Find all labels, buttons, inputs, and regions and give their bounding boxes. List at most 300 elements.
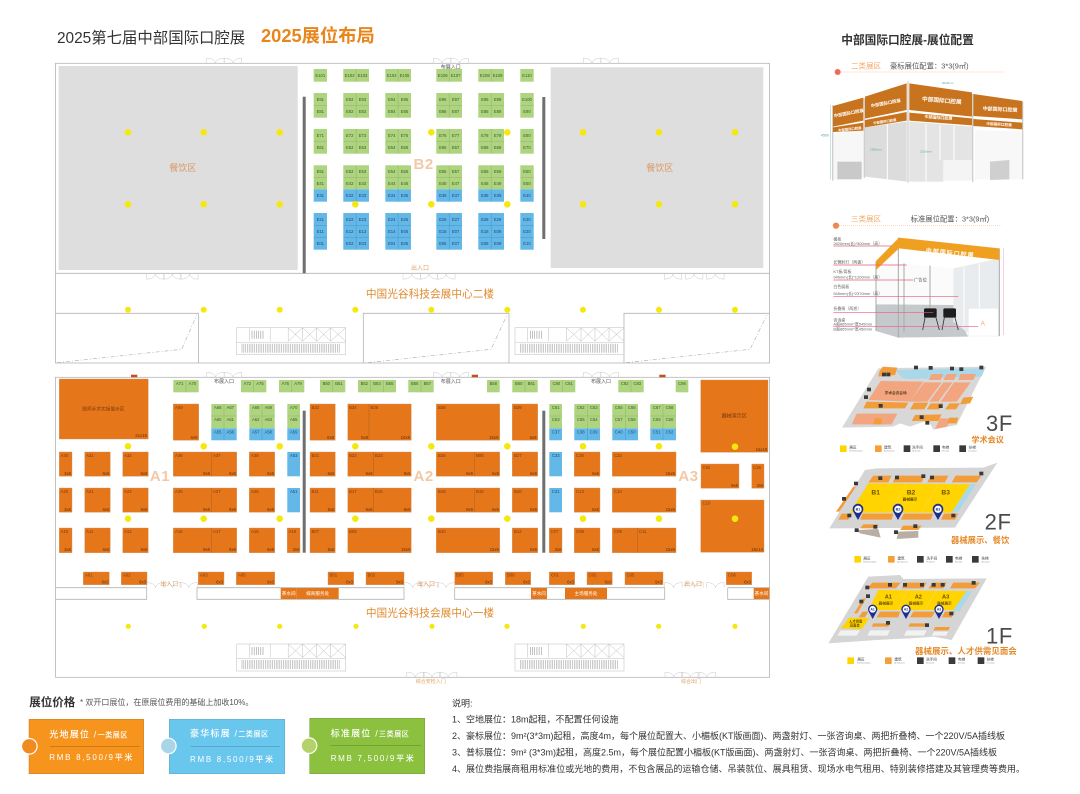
premium booth fascia text: 中部国际口腔展: [986, 121, 1012, 127]
orange booth row: y528: B07: [312, 529, 320, 534]
booth band: E61-E80: E68: [481, 145, 489, 150]
orange booth row: 9m deep: 10x9: [401, 435, 411, 440]
booth band: E01-E30: E21: [317, 217, 325, 222]
orange booth row: y528: 6x6: [267, 547, 275, 552]
orange booth row: y452: 3x6: [757, 483, 764, 488]
legend 2F: 建筑: [897, 555, 905, 560]
price card: premium booth: [160, 719, 285, 774]
standard booth header: 三类展区: [851, 214, 881, 224]
legend 1F: 电梯: [958, 657, 966, 662]
orange booth row: y528: 15x6: [401, 547, 411, 552]
orange booth row: along corridor: B05: [456, 572, 464, 578]
legend 3F: Exhibition Area: [849, 450, 863, 453]
standard booth annotations: 折叠椅（两把）: [833, 305, 861, 311]
orange booth row: y488: C10: [614, 489, 622, 494]
booth band: E61-E80: E75: [401, 133, 409, 138]
booth band: E41-E60: E58: [481, 169, 489, 174]
booth band: E81-E100: E85: [401, 109, 409, 114]
map 3F: [842, 366, 986, 430]
zone labels A1 A2 A3: A2: [414, 468, 434, 485]
price card: raw space: RMB 8,500/9平米: [49, 752, 134, 762]
booth band: E01-E30: E28: [481, 217, 489, 222]
booth group: green and blue standard blocks C37-C68: C50: [628, 430, 636, 434]
booth band: E31-E40: E36: [439, 193, 447, 198]
standard booth header: [833, 214, 1002, 229]
legend 3F: 建筑: [884, 445, 892, 450]
booth band: E01-E30: E13: [359, 229, 367, 234]
booth group: green and blue standard blocks C37-C68: C39: [590, 430, 598, 434]
standard booth structure: [876, 238, 999, 338]
booth band: E41-E60: E53: [359, 169, 367, 174]
orange booth row: y452: 9x6: [203, 471, 211, 476]
booth band: E81-E100: E88: [481, 109, 489, 114]
booth band: E61-E80: E61: [317, 145, 325, 150]
booth band: E81-E100: E83: [359, 109, 367, 114]
price card: standard booth: RMB 7,500/9平米: [331, 753, 415, 763]
booth band: E81-E100: E96: [439, 97, 447, 102]
orange booth row: along corridor: 6x3: [523, 580, 531, 584]
legend 3F: [840, 445, 977, 453]
floor 2 lift core right: [515, 328, 624, 355]
notes text block: [452, 698, 1025, 774]
standard booth annotations: B面865mm*宽450mm: [833, 325, 873, 331]
orange booth row: y488: B17: [349, 489, 357, 494]
booth band: E81-E100: [314, 93, 534, 118]
standard booth annotations: [833, 235, 1003, 335]
booth group: green and blue standard blocks A55-A70: A56: [227, 430, 235, 434]
orange booth row: along corridor: C06: [728, 572, 736, 578]
orange booth row: y528: 15x6: [490, 547, 500, 552]
booth band: E81-E100: E98: [481, 97, 489, 102]
booth group: green and blue standard blocks A55-A70: A51: [290, 489, 298, 494]
booth band: E31-E40: E38: [481, 193, 489, 198]
orange booth row: y488: B11: [312, 489, 319, 494]
service rooms along corridor: 茶水间: [755, 590, 769, 597]
booth band: E61-E80: E66: [439, 145, 447, 150]
booth band: E01-E30: E11: [317, 229, 325, 234]
booth group: green and blue standard blocks C37-C68: C65: [615, 405, 623, 410]
orange booth row: 9m deep: 5x9: [361, 435, 369, 440]
booth band: E61-E80: [314, 129, 534, 154]
premium booth fascia text: 中部国际口腔展: [873, 117, 897, 125]
booth band: E01-E30: E08: [481, 241, 489, 246]
premium booth dimensions: [821, 81, 954, 179]
booth group: green and blue standard blocks A55-A70: A62: [252, 417, 260, 422]
orange booth row: 9m deep: 15x9: [489, 435, 499, 440]
label 3F: [971, 411, 1013, 444]
orange booth row: y488: 6x6: [103, 507, 110, 512]
booth band: E01-E30: E05: [401, 241, 409, 246]
price card: raw space: 光地展位 /一类展区: [49, 728, 128, 740]
orange booth row: y452: 9x6: [404, 471, 411, 476]
booth price heading: 展位价格: [29, 695, 76, 709]
booth band: E01-E30: E26: [439, 217, 447, 222]
legend 2F: 扶梯: [981, 555, 989, 560]
legend 3F: 洗手间: [912, 445, 923, 450]
label 1F: 1F: [986, 624, 1013, 649]
orange booth row: y528: A16: [175, 529, 183, 534]
orange booth row: y528: B09: [349, 529, 357, 534]
booth row: top green A71-C96: A71: [176, 381, 184, 386]
premium booth dimensions: 2100mm: [920, 150, 932, 154]
orange booth row: y488: 15x6: [666, 507, 676, 512]
orange booth row: y488: A26: [175, 489, 183, 494]
booth band: E01-E30: E27: [452, 217, 460, 222]
premium booth fascia text: 中部国际口腔展: [838, 125, 862, 133]
booth band: E41-E60: E49: [494, 181, 502, 186]
booth band: E01-E30: E07: [452, 229, 460, 234]
booth band: E81-E100: E90: [523, 109, 531, 114]
booth row: top green A71-C96: B61: [528, 381, 536, 386]
booth band: E01-E30: [314, 213, 534, 250]
floor 2 hall name: 中国光谷科技会展中心二楼: [366, 288, 494, 300]
service rooms along corridor: 茶水间: [532, 590, 546, 597]
orange booth row: along corridor: 6x3: [744, 580, 752, 584]
orange booth row: y528: C11: [639, 529, 647, 534]
booth band: E61-E80: E67: [452, 145, 460, 150]
booth group: green and blue standard blocks C37-C68: C60: [666, 417, 674, 422]
standard booth annotations: A面865mm*宽545mm: [833, 320, 873, 326]
legend 3F: 扶梯: [969, 445, 976, 450]
pins 2F: B3: [936, 508, 940, 512]
booth row: top green A71-C96: B58: [490, 381, 498, 386]
orange booth row: along corridor: A05: [238, 572, 246, 578]
orange booth row: y488: 9x6: [466, 507, 474, 512]
booth band: E61-E80: E65: [401, 145, 409, 150]
booth band: E81-E100: E93: [359, 97, 367, 102]
orange booth row: y528: C07: [550, 529, 559, 534]
booth band: E41-E60: E46: [439, 181, 447, 186]
booth band: E41-E60: E56: [439, 169, 447, 174]
orange booth row: y528: C09: [614, 529, 622, 534]
price card: standard booth: [301, 718, 425, 774]
standard booth annotations: 咨询桌: [833, 316, 845, 322]
orange booth row: along corridor: 6x3: [605, 580, 612, 584]
catering area right: [551, 67, 763, 268]
orange booth row: 9m deep: 6x9: [327, 435, 335, 440]
booth band: E01-E30: E29: [494, 217, 502, 222]
standard booth annotations: 楣板: [833, 235, 841, 241]
booth row: top green A71-C96: A76: [282, 381, 290, 386]
booth band: E01-E30: E04: [388, 241, 396, 246]
orange booth row: y528: B10: [438, 529, 446, 534]
zone labels A1 A2 A3: [150, 468, 699, 485]
booth band: E41-E60: E45: [401, 181, 409, 186]
orange booth row: y452: 6x6: [592, 471, 600, 476]
booth band: E41-E60: E52: [346, 169, 354, 174]
catering area left: [59, 66, 298, 270]
legend 1F: 洗手间: [926, 657, 937, 662]
orange booth row: y452: C22: [614, 453, 622, 458]
price card: premium booth: 豪华标展 /二类展区: [190, 728, 269, 738]
booth group: green and blue standard blocks A55-A70: A57: [252, 430, 260, 434]
orange booth row: y528: A10: [60, 529, 69, 534]
label 1F: [915, 624, 1017, 656]
pins 2F: B2: [896, 508, 900, 512]
booth band: E41-E60: E41: [317, 181, 325, 186]
booth group: green and blue standard blocks A55-A70: A60: [214, 417, 222, 422]
booth group: green and blue standard blocks C37-C68: C61: [552, 405, 560, 410]
raw space: surgical demo area: [59, 379, 148, 439]
orange booth row: y452: 15x6: [666, 471, 676, 476]
booth group: green and blue standard blocks C37-C68: C31: [552, 489, 560, 494]
orange booth row: y452: 6x6: [492, 471, 500, 476]
booth band: E101-E110: E108: [480, 73, 490, 78]
map 1F: [828, 575, 987, 643]
standard booth annotations: KT板/背板: [833, 268, 852, 274]
title: 2025展位布局: [261, 25, 375, 46]
orange booth row: y452: 6x6: [229, 471, 237, 476]
standard booth annotations: 2820mm(长)*300mm（高）: [833, 240, 882, 246]
orange booth row: y452: 6x6: [328, 471, 335, 476]
booth band: E01-E30: E12: [346, 229, 354, 234]
booth row: top green A71-C96: [173, 380, 688, 392]
standard booth annotations: 946mm(长)*1200mm（高）: [833, 273, 882, 279]
orange booth row: y488: 6x6: [366, 507, 373, 512]
orange booth row: y452: 6x6: [141, 471, 148, 476]
orange booth row: y452: 6x6: [267, 471, 275, 476]
booth band: E41-E60: E48: [481, 181, 489, 186]
booth band: E101-E110: E110: [522, 73, 532, 78]
orange booth row: y528: 6x6: [103, 547, 110, 552]
service rooms along corridor: 茶水间: [282, 590, 296, 597]
map 1F: 人才供需: [849, 618, 863, 623]
booth band: E31-E40: E40: [523, 193, 531, 198]
pins 1F: A3: [937, 608, 941, 612]
legend 1F: 扶梯: [987, 657, 994, 662]
booth band: E81-E100: E94: [388, 97, 396, 102]
orange booth row: y452: 6x6: [366, 471, 373, 476]
legend 3F: Elevator: [942, 450, 950, 453]
booth band: E101-E110: [314, 69, 534, 82]
booth row: top green A71-C96: C80: [552, 381, 561, 386]
orange booth row: y488: 6x6: [592, 507, 600, 512]
booth band: E81-E100: E97: [452, 97, 460, 102]
panel: second floor plan: [56, 58, 770, 363]
booth price heading: * 双开口展位，在原展位费用的基础上加收10%。: [80, 697, 253, 707]
booth band: E41-E60: E60: [523, 169, 531, 174]
orange booth row: y452: C92: [702, 465, 711, 470]
notes text block: 4、展位费指展商租用标准位或光地的费用，不包含展品的运输仓储、吊装就位、展具租赁、现场水电气租用、特别装修搭建及其管理费等费用。: [452, 763, 1025, 774]
notes text block: 3、普标展位：9m² (3*3m)起租，高度2.5m，每个展位配置小楣板(KT版画面)、两盏射灯、一张咨询桌、两把折叠椅、一个220V/5A插线板: [452, 746, 997, 758]
booth row: top green A71-C96: A70: [189, 381, 197, 386]
booth band: E61-E80: E70: [523, 145, 531, 150]
orange booth row: along corridor: 6x3: [102, 580, 109, 584]
orange booth row: along corridor: 9x3: [655, 580, 663, 584]
orange booth row: y528: [59, 528, 676, 553]
floor 1 entrance labels: 综合安检入门: [416, 678, 446, 685]
booth band: E31-E40: E35: [401, 193, 409, 198]
service rooms along corridor: 媒商服务处: [306, 590, 330, 597]
floor 2 entrance labels: [411, 64, 461, 272]
legend 2F: Architecture: [897, 560, 909, 563]
booth band: E101-E110: E105: [400, 73, 410, 78]
booth band: E31-E40: E37: [452, 193, 460, 198]
premium booth header: 二类展区: [851, 60, 881, 70]
orange booth row: 9m deep: 6x9: [191, 435, 198, 440]
booth row: top green A71-C96: C81: [565, 381, 574, 386]
booth band: E01-E30: E07: [452, 241, 460, 246]
orange booth row: y528: A12: [124, 529, 132, 534]
orange booth row: y488: 6x6: [141, 507, 148, 512]
orange booth row: along corridor: 9x3: [267, 580, 275, 584]
booth group: green and blue standard blocks C37-C68: C54: [590, 417, 598, 422]
title: [57, 25, 375, 47]
booth row: top green A71-C96: A72: [244, 381, 252, 386]
orange booth row: y528: 6x6: [328, 547, 335, 552]
panel: standard booth illustration: [833, 214, 1003, 338]
orange booth row: 9m deep: B35: [370, 405, 379, 410]
floor 1 entrance labels: 布展入口: [591, 378, 611, 385]
label 2F: [951, 509, 1012, 545]
booth row: top green A71-C96: B50: [323, 381, 331, 386]
premium booth fascia panels: [833, 83, 1022, 132]
booth band: E61-E80: E62: [346, 145, 354, 150]
booth group: green and blue standard blocks C37-C68: C59: [653, 417, 661, 422]
booth band: E101-E110: E102: [345, 73, 355, 78]
orange booth row: y488: 9x6: [203, 507, 211, 512]
map 1F: A3: [942, 595, 949, 601]
booth band: E01-E30: E30: [523, 217, 531, 222]
standard booth chairs: [923, 308, 958, 330]
orange booth row: y452: A36: [175, 453, 183, 458]
map 1F: A2: [915, 595, 922, 601]
legend 1F: 展区: [857, 657, 865, 662]
columns: yellow dots floor 1: [125, 443, 738, 629]
map 2F: B1: [871, 489, 880, 496]
orange booth row: y452: A31: [86, 453, 94, 458]
premium booth dimensions: 2500mm: [870, 148, 882, 152]
catering area right: 餐饮区: [646, 162, 673, 173]
booth band: E81-E100: E100: [522, 97, 533, 102]
orange booth row: along corridor: 9x3: [485, 580, 493, 584]
pins 2F: B1: [856, 508, 860, 512]
orange booth row: y488: 6x6: [328, 507, 335, 512]
orange booth row: y452: C36: [753, 465, 761, 470]
orange booth row: y488: B18: [438, 489, 446, 494]
orange booth row: y488: 3x6: [64, 507, 72, 512]
booth band: E81-E100: E95: [401, 97, 409, 102]
orange booth row: y528: 9x6: [203, 547, 211, 552]
legend 2F: 电梯: [955, 555, 963, 560]
booth band: E101-E110: E101: [315, 73, 326, 78]
orange booth row: y452: B23: [375, 453, 383, 458]
orange booth row: y528: C08: [576, 529, 584, 534]
booth band: E41-E60: E57: [452, 169, 460, 174]
premium booth header: 豪标展位配置：3*3(9㎡): [890, 61, 969, 70]
booth group: green and blue standard blocks A55-A70: [211, 404, 300, 512]
floor 2 lift core left: [237, 328, 346, 355]
orange booth row: y488: A21: [86, 489, 94, 494]
booth band: E101-E110: E103: [358, 73, 368, 78]
booth band: E31-E40: E33: [359, 193, 367, 198]
map 3F: 学术会议会场: [885, 390, 907, 395]
orange booth row: along corridor: B01: [330, 572, 338, 578]
legend 1F: Architecture: [894, 662, 906, 665]
orange booth row: y488: 6x6: [530, 507, 538, 512]
notes text block: 2、豪标展位：9m²(3*3m)起租，高度4m，每个展位配置大、小楣板(KT版画面)、两盏射灯、一张咨询桌、两把折叠椅、一个220V/5A插线板: [452, 730, 1005, 741]
orange booth row: y528: 6x6: [530, 547, 538, 552]
orange booth row: y488: B16: [375, 489, 383, 494]
standard booth structure: A: [980, 321, 985, 328]
booth group: green and blue standard blocks C37-C68: C37: [552, 430, 560, 434]
orange booth row: along corridor: 9x3: [396, 580, 404, 584]
orange booth row: 9m deep: B32: [312, 405, 320, 410]
orange booth row: y488: C13: [576, 489, 584, 494]
orange booth row: along corridor: C01: [551, 572, 559, 578]
columns: yellow dots floor 2: [125, 129, 738, 313]
orange booth row: y452: C35: [576, 453, 584, 458]
booth band: E41-E60: E43: [359, 181, 367, 186]
booth group: green and blue standard blocks C37-C68: [549, 404, 676, 512]
map 1F: 器械展示: [937, 600, 952, 605]
premium booth fascia text: 中部国际口腔展: [924, 113, 953, 121]
orange booth row: y528: 15x6: [666, 547, 676, 552]
service rooms along corridor: 主场服务处: [575, 590, 598, 597]
orange booth row: y452: 9x6: [466, 471, 474, 476]
booth group: green and blue standard blocks A55-A70: A58: [265, 430, 273, 434]
booth group: green and blue standard blocks C37-C68: C68: [666, 405, 674, 410]
booth band: E41-E60: E44: [388, 181, 396, 186]
booth band: E41-E60: E54: [388, 169, 396, 174]
booth band: E01-E30: E25: [401, 217, 409, 222]
map 2F: 器械展示: [903, 497, 918, 502]
booth band: E01-E30: E09: [494, 241, 502, 246]
booth band: E61-E80: E74: [388, 133, 396, 138]
legend 1F: Restroom: [926, 662, 935, 665]
orange booth row: y488: A27: [213, 489, 221, 494]
booth band: E41-E60: E59: [494, 169, 502, 174]
booth group: green and blue standard blocks C37-C68: C62: [577, 405, 585, 410]
map 2F: B3: [941, 489, 950, 496]
orange booth row: along corridor: C05: [626, 572, 635, 578]
standard booth annotations: 白色展板: [833, 283, 849, 289]
booth band: E41-E60: E47: [452, 181, 460, 186]
orange booth row: along corridor: 6x3: [139, 580, 147, 584]
booth band: E01-E30: E20: [523, 229, 531, 234]
booth band: E81-E100: E84: [388, 109, 396, 114]
orange booth row: y488: 6x6: [267, 507, 275, 512]
orange booth row: y452: B05: [476, 453, 484, 458]
booth group: green and blue standard blocks C37-C68: C66: [628, 405, 636, 410]
orange booth row: along corridor: 6x3: [216, 580, 224, 584]
booth band: E81-E100: E82: [346, 109, 354, 114]
booth row: top green A71-C96: C82: [621, 381, 629, 386]
orange booth row: along corridor: 6x3: [567, 580, 575, 584]
orange booth row: y488: A20: [60, 489, 69, 494]
orange booth row: y452: B22: [349, 453, 357, 458]
label 1F: 器械展示、人才供需见面会: [915, 646, 1017, 656]
booth band: E01-E30: E24: [388, 217, 396, 222]
pins 1F: [868, 605, 944, 619]
standard booth fascia: 中部国际口腔展: [925, 246, 975, 260]
orange booth row: y452: 9x6: [731, 483, 739, 488]
map 1F: A1: [885, 595, 892, 601]
legend 1F: Exhibition Area: [857, 662, 871, 665]
booth price heading: [29, 695, 253, 709]
orange booth row: y528: A18: [251, 529, 259, 534]
orange booth row: y452: B27: [514, 453, 522, 458]
panel: first floor plan: [56, 372, 770, 685]
orange booth row: y488: A22: [124, 489, 132, 494]
label 3F: 学术会议: [971, 434, 1005, 444]
floor 1 lift core right: [515, 644, 624, 671]
legend 2F: 洗手间: [926, 555, 938, 560]
floor 1 entrance labels: 综合出门: [681, 678, 701, 685]
booth band: E81-E100: E87: [452, 109, 460, 114]
pins 1F: A1: [871, 608, 875, 612]
legend 2F: Escalator: [981, 560, 990, 563]
